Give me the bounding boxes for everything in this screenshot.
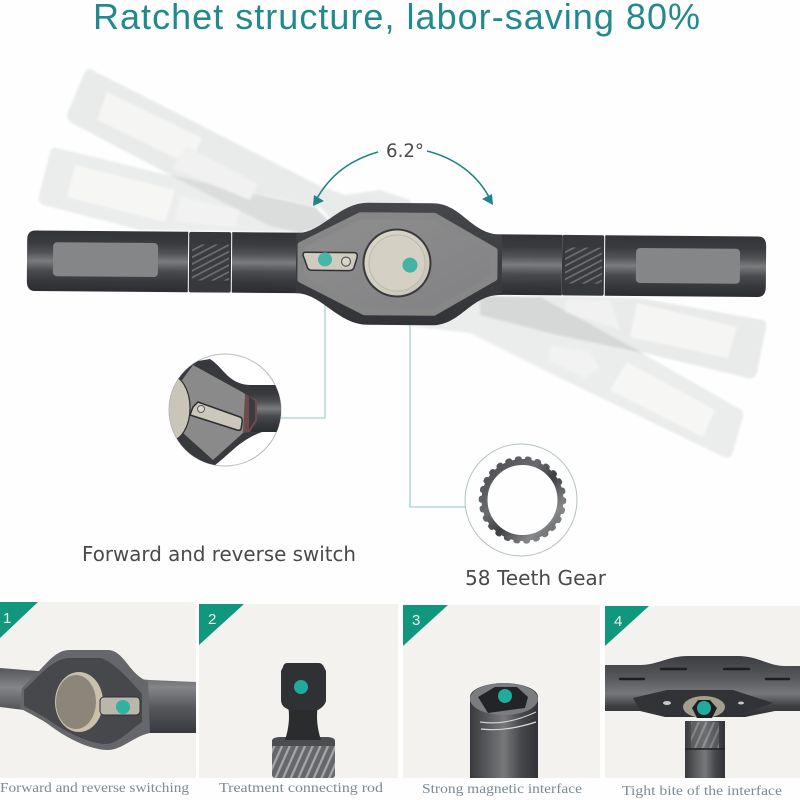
head outer [20, 650, 150, 750]
handle [605, 656, 800, 717]
leader lines [280, 305, 465, 507]
badge number: 3 [412, 612, 420, 629]
caption 4: Tight bite of the interface [622, 784, 782, 799]
right grip pad [636, 248, 740, 284]
badge [199, 604, 244, 645]
badge [605, 606, 649, 646]
panel 3: magnetic interface [403, 605, 600, 778]
switch label: Forward and reverse switch [82, 542, 356, 566]
head underside [633, 690, 772, 708]
badge [0, 602, 38, 638]
badge [403, 605, 448, 646]
socket [470, 683, 538, 778]
disc [55, 672, 103, 732]
angle arc arrows with 6.2 degree label: 6.2° [386, 140, 424, 162]
ghost handles: swing range [39, 69, 766, 458]
gear detail inset [465, 444, 577, 556]
panel 4: tight bite [605, 606, 800, 778]
screw holes [663, 701, 744, 705]
switch detail inset [168, 354, 282, 466]
main ratchet handle [27, 200, 766, 328]
teal dot [294, 680, 308, 694]
left knurled collar [189, 232, 231, 293]
panel 2: connecting rod [199, 604, 398, 778]
badge number: 4 [614, 613, 622, 630]
panel 1: forward and reverse switching [0, 602, 196, 778]
left shaft [27, 230, 188, 292]
switch lever [303, 252, 357, 271]
teal dot [116, 700, 130, 714]
gear label: 58 Teeth Gear [465, 566, 607, 590]
rod [685, 721, 725, 778]
lever [100, 697, 140, 715]
right inner shaft [485, 234, 562, 295]
badge number: 1 [3, 610, 11, 627]
left grip pad [53, 242, 158, 277]
rod [272, 663, 335, 778]
head plate [301, 215, 494, 313]
caption 1: Forward and reverse switching [0, 781, 189, 796]
handles [0, 668, 196, 733]
head plate [24, 658, 142, 744]
head outer [295, 202, 502, 326]
caption 3: Strong magnetic interface [422, 782, 582, 797]
teal dot [697, 701, 711, 715]
angle arc arrows with 6.2 degree label [313, 140, 493, 206]
hex [692, 700, 717, 718]
teal dot [498, 689, 512, 703]
right shaft [605, 235, 766, 297]
slots [620, 669, 789, 679]
socket collar [683, 696, 725, 718]
caption 2: Treatment connecting rod [219, 781, 383, 796]
ratchet disc [362, 228, 432, 298]
inner left shaft [232, 232, 312, 293]
badge number: 2 [208, 611, 216, 628]
right knurled collar [562, 235, 604, 296]
